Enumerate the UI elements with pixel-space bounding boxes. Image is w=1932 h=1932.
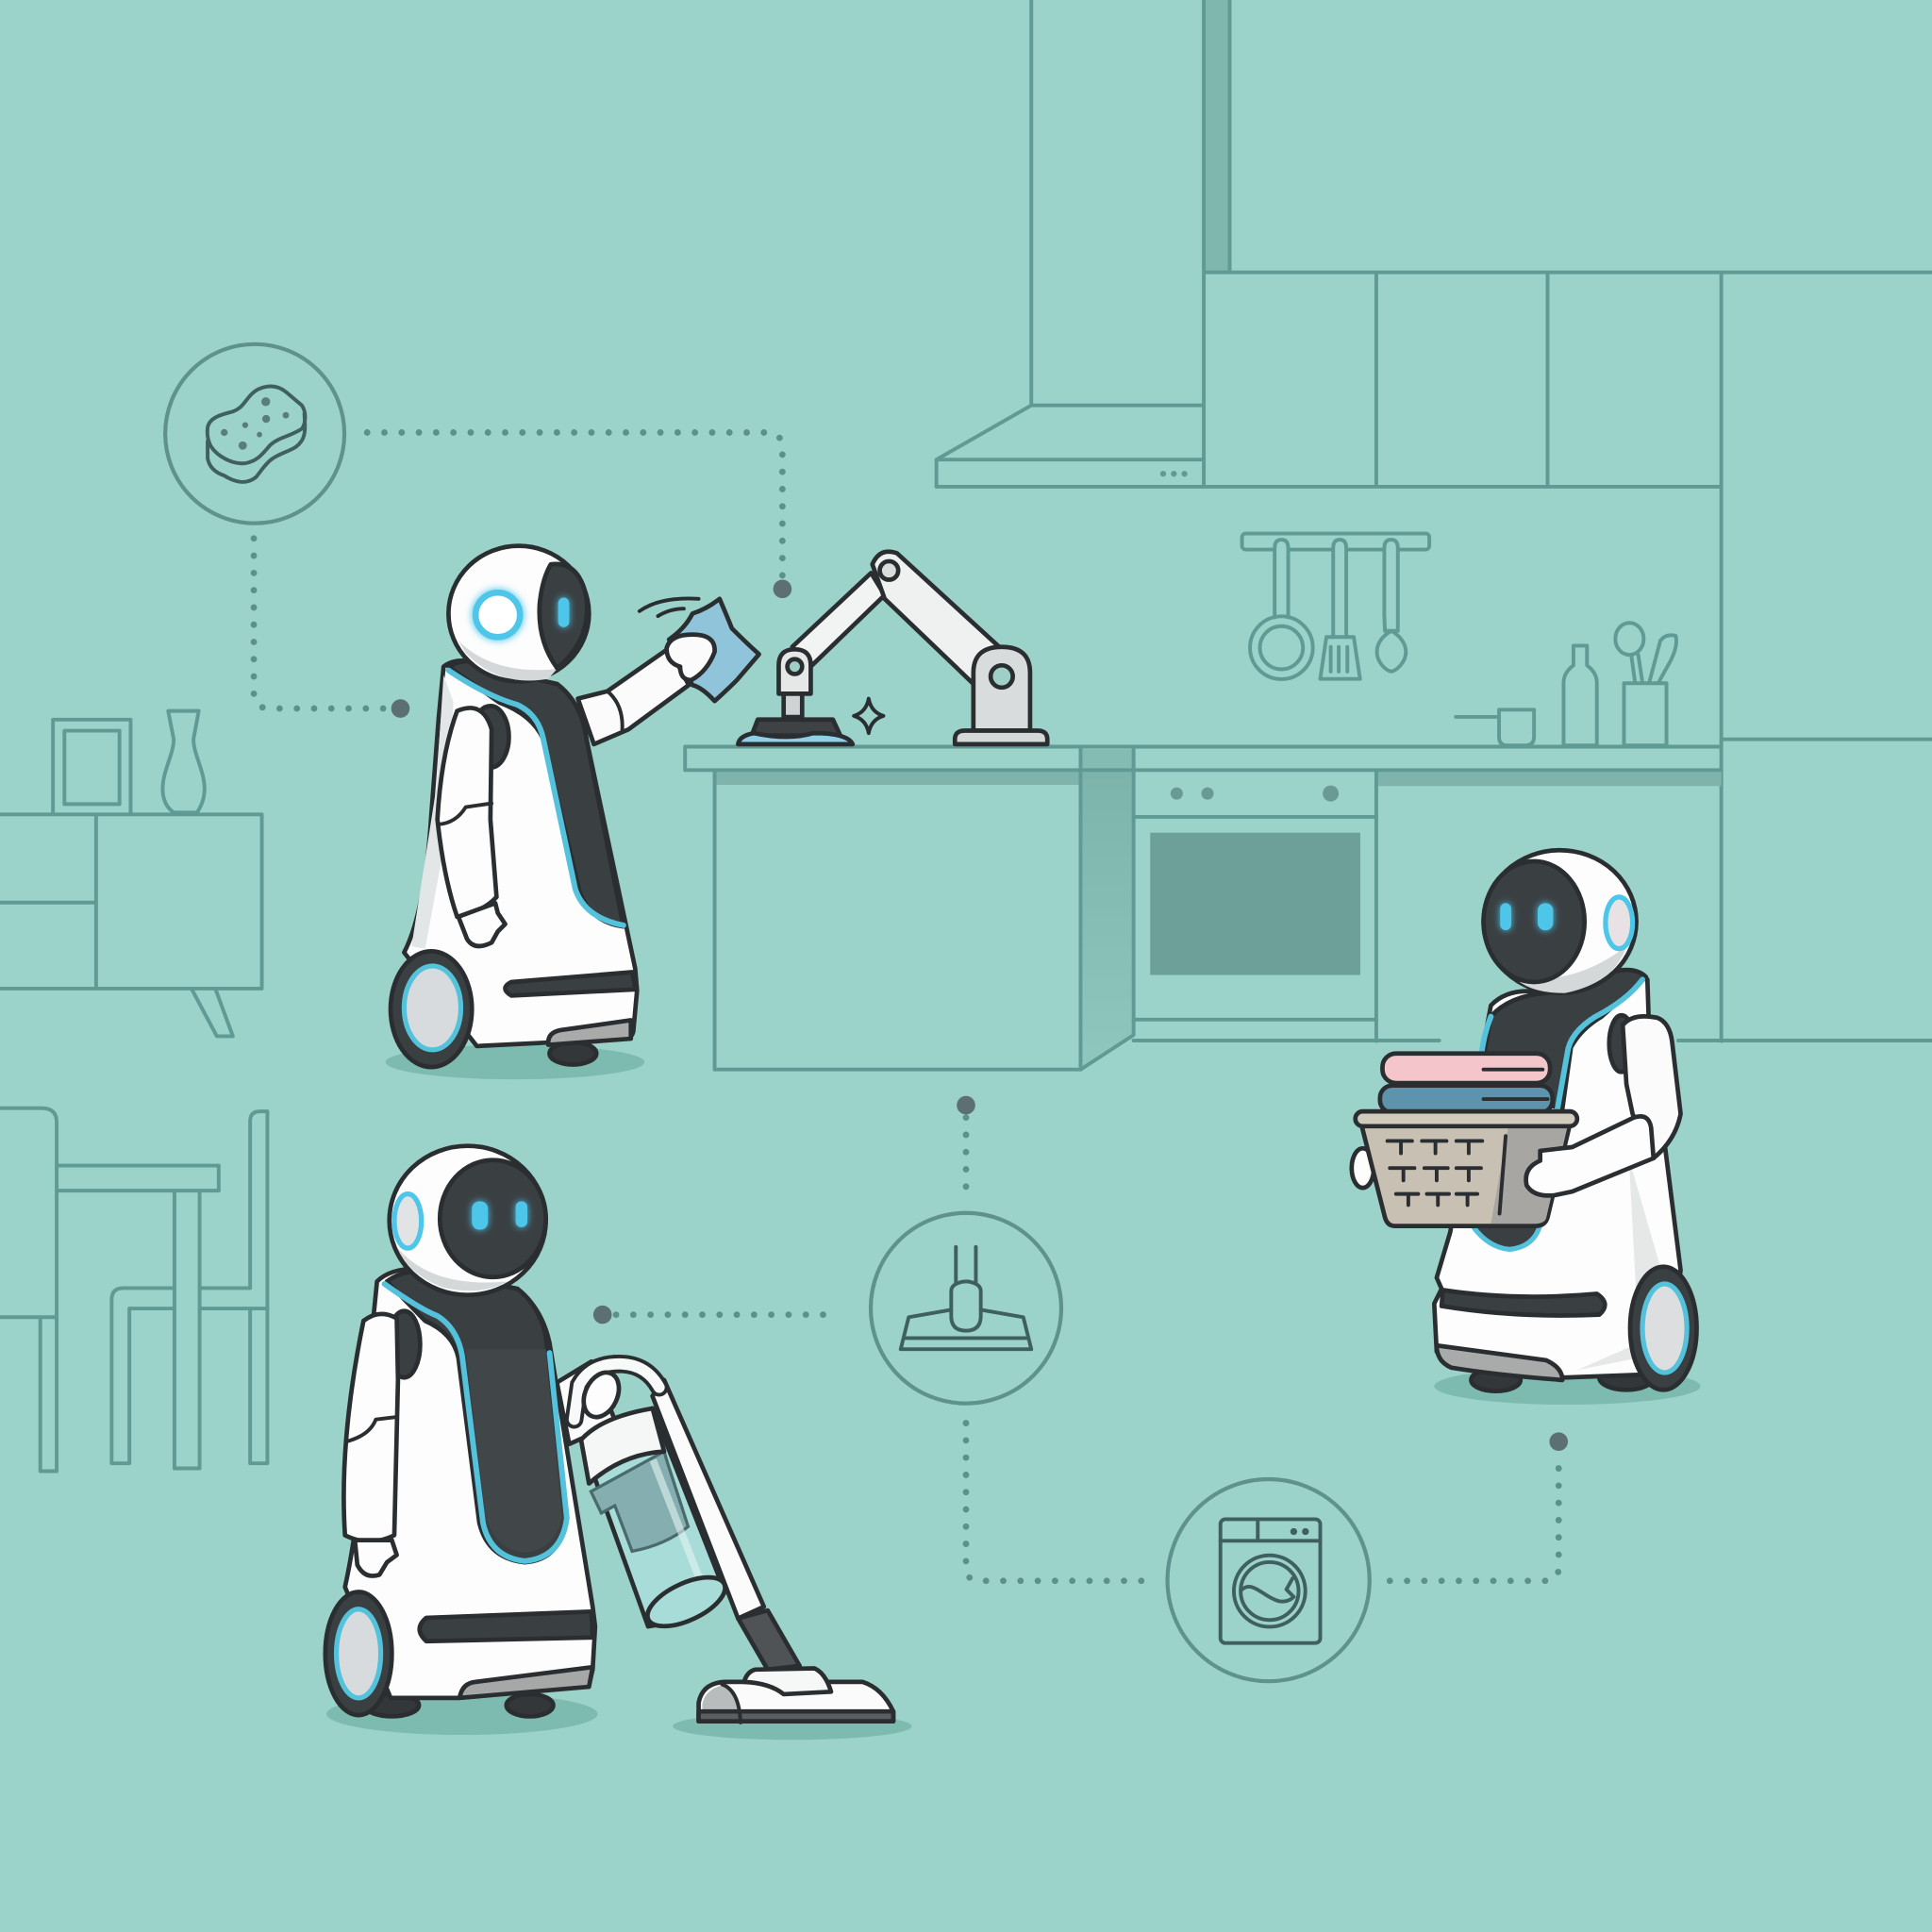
- base band: [420, 1611, 592, 1641]
- base band: [506, 973, 636, 995]
- torso: [1434, 974, 1681, 1377]
- robot: vacuuming: [325, 1146, 912, 1740]
- light stripe: [448, 671, 624, 925]
- dining table and chairs: [0, 1108, 267, 1472]
- elbow joint: [880, 561, 898, 580]
- foot: [550, 1042, 596, 1064]
- sideboard with frame and vase: [0, 711, 262, 1036]
- side arm: [1623, 1016, 1681, 1158]
- sparkle: [854, 699, 883, 733]
- wheel: [325, 1592, 391, 1715]
- wipe motion lines: [640, 598, 699, 616]
- basket: [1356, 1111, 1577, 1226]
- range hood: [937, 0, 1204, 487]
- panel lighter section: [466, 1349, 562, 1553]
- lower hand: [355, 1541, 397, 1576]
- dark chest panel: [1478, 970, 1646, 1109]
- torso: [345, 1269, 595, 1698]
- grey trim: [548, 1020, 631, 1045]
- lower hand: [458, 903, 506, 946]
- wheel: [391, 951, 472, 1067]
- tall cabinet: [1722, 740, 1932, 1041]
- robot arm wiping counter: [738, 552, 1047, 744]
- light stripe: [385, 1284, 567, 1561]
- towels: [1380, 1054, 1553, 1112]
- outstretched arm: [578, 648, 689, 744]
- base joint: [991, 665, 1013, 688]
- robot: wiping: [386, 546, 759, 1079]
- grey trim: [459, 1667, 592, 1698]
- counter top and base: [685, 747, 1932, 1070]
- base band: [1441, 1291, 1605, 1316]
- canister glass: [581, 1408, 724, 1626]
- forearm link: [792, 573, 885, 667]
- nozzle top: [744, 1668, 831, 1694]
- shoulder: [472, 706, 508, 768]
- neck: [738, 1610, 800, 1670]
- icon: vacuum head: [871, 1213, 1061, 1404]
- kitchen line drawing: [0, 0, 1932, 1472]
- cloth: [669, 599, 759, 701]
- water: [738, 733, 853, 744]
- nozzle: [699, 1682, 893, 1722]
- shoulder: [1609, 1015, 1634, 1072]
- icon: washing machine: [1168, 1479, 1370, 1681]
- shadow: [1434, 1368, 1700, 1405]
- reaching arm: [557, 1361, 616, 1444]
- hand: [667, 635, 715, 680]
- base column: [974, 647, 1030, 731]
- shoulder: [388, 1311, 420, 1377]
- stick: [653, 1380, 764, 1619]
- head: [448, 546, 589, 681]
- robot: carrying laundry: [1352, 850, 1700, 1405]
- side arm: [438, 708, 496, 917]
- grey trim: [1437, 1345, 1562, 1380]
- wheel: [1630, 1267, 1697, 1390]
- near forearm and hand: [1526, 1116, 1654, 1195]
- hanging utensils: [1242, 534, 1429, 679]
- vacuum: [575, 1364, 893, 1723]
- icon: sponge: [165, 344, 344, 524]
- shadow: [386, 1045, 644, 1079]
- vacuum shadow: [673, 1713, 912, 1740]
- dotted connectors: [254, 432, 1568, 1581]
- head: [390, 1146, 546, 1295]
- side shading: [411, 675, 454, 949]
- head: [1484, 850, 1637, 993]
- feet: [365, 1694, 553, 1716]
- upper wall cabinets: [1204, 0, 1932, 747]
- dark chest panel: [448, 661, 624, 926]
- far hand: [1352, 1148, 1374, 1188]
- arm base plate: [955, 731, 1047, 744]
- upper arm link: [873, 552, 1001, 684]
- filter flange: [591, 1452, 688, 1551]
- oven: [1134, 786, 1376, 1020]
- canister cap: [581, 1408, 664, 1484]
- body shading: [1577, 1158, 1661, 1370]
- wrist housing: [778, 649, 810, 717]
- side arm: [343, 1314, 398, 1541]
- canister bottom: [641, 1567, 732, 1636]
- cleaning pad: [752, 720, 841, 736]
- nozzle grey corner: [702, 1686, 740, 1710]
- shadow: [326, 1693, 597, 1735]
- lower panel curve: [1469, 1220, 1541, 1249]
- torso: [404, 660, 637, 1046]
- dark chest panel: [387, 1272, 567, 1562]
- gripping hand: [577, 1367, 625, 1423]
- glass highlight: [653, 1460, 708, 1602]
- counter items: [1456, 623, 1676, 745]
- handle: [575, 1364, 659, 1420]
- feet: [1472, 1365, 1654, 1391]
- light stripe: [1481, 979, 1642, 1109]
